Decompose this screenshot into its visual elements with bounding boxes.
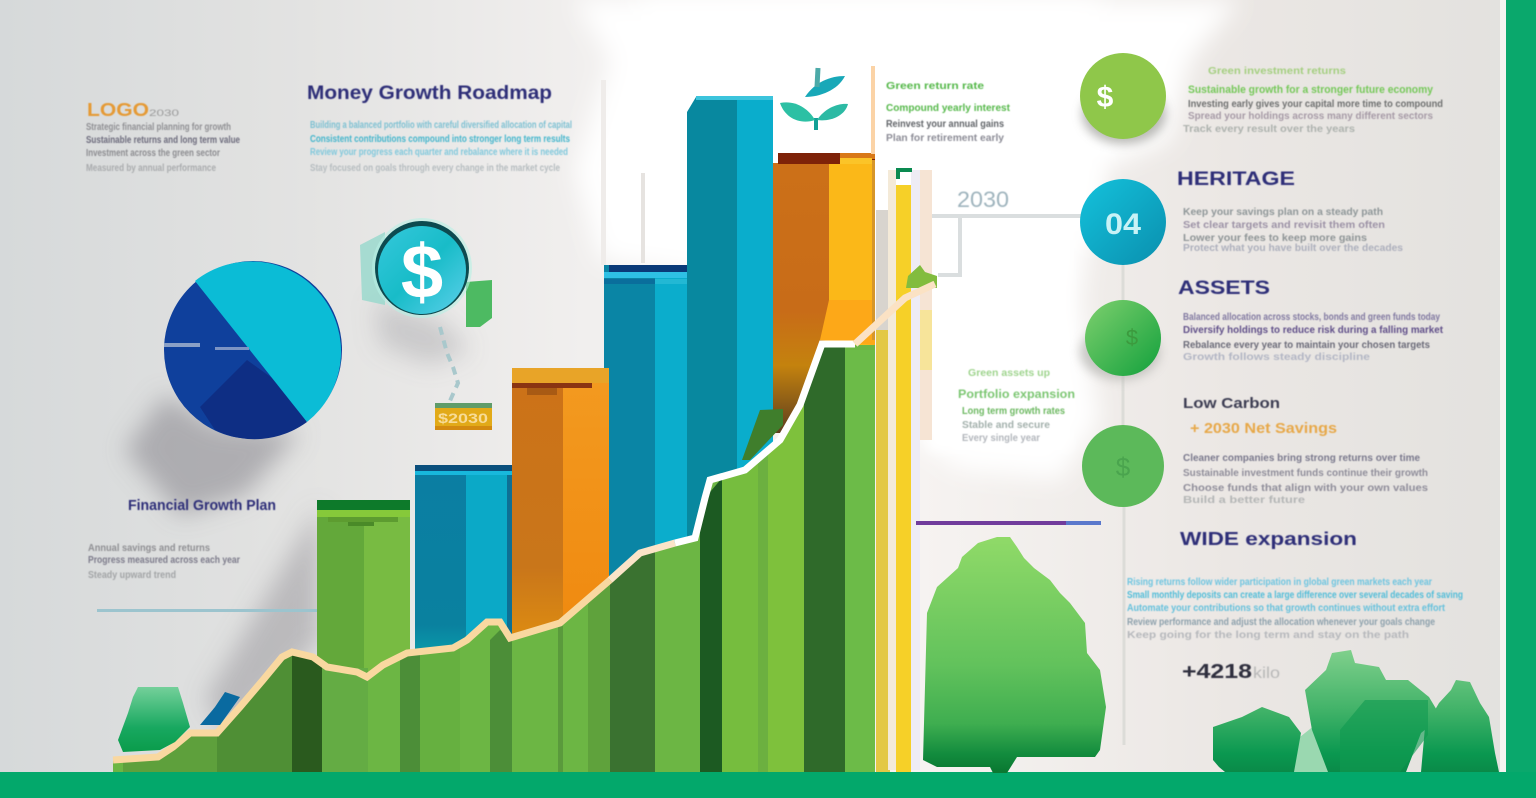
stat figure: +4218	[1182, 661, 1252, 683]
text block: centre callout	[958, 368, 1075, 444]
text block: right 3: ASSETS	[1178, 278, 1270, 299]
text block: right 2: Set clear targets and revisit them often	[1183, 220, 1385, 231]
text block: right 1: Green investment returns	[1208, 66, 1346, 77]
text block: right 5: WIDE expansion	[1180, 529, 1357, 549]
text block: top left: Sustainable returns and long term value	[86, 135, 240, 146]
stat figure: kilo	[1253, 665, 1280, 682]
text block: lower left	[88, 497, 276, 581]
tag label: $2030	[438, 410, 488, 426]
heading and text block: top centre	[307, 83, 572, 174]
text block: right 2: HERITAGE	[1177, 169, 1295, 190]
text block: lower left: Steady upward trend	[88, 570, 176, 581]
text block: right 4: Build a better future	[1183, 495, 1306, 506]
icon: small tree left	[118, 687, 190, 752]
text block: right 5: Small monthly deposits can create a large difference over several decades of saving	[1127, 590, 1463, 601]
text block: right 4: Sustainable investment funds continue their growth	[1183, 468, 1428, 479]
text block: right 5	[1127, 529, 1463, 641]
text block: centre callout: Green assets up	[968, 368, 1050, 379]
heading and text block: top centre: Review your progress each quarter and rebalance where it is needed	[310, 147, 568, 158]
text block: lower left: Financial Growth Plan	[128, 497, 276, 514]
text block: centre callout: Long term growth rates	[962, 406, 1065, 417]
text block: top middle	[886, 81, 1011, 144]
divider line	[871, 66, 875, 154]
connector: right circles	[1123, 260, 1124, 745]
year label with connector	[932, 187, 1082, 275]
heading and text block: top centre: Building a balanced portfolio with careful diversified allocation of capital	[310, 120, 572, 131]
right tree group	[1213, 650, 1499, 772]
icon: teal circle	[1080, 179, 1166, 265]
text block: right 2: Lower your fees to keep more gains	[1183, 233, 1367, 244]
text block: top left: 2030	[149, 108, 179, 118]
text block: lower left: Progress measured across each year	[88, 555, 240, 566]
text block: top left: LOGO	[87, 100, 149, 120]
text block: right 2: Protect what you have built over the decades	[1183, 243, 1403, 254]
icon: lower green circle: $	[1116, 452, 1131, 482]
text block: right 2: Keep your savings plan on a steady path	[1183, 207, 1383, 218]
text block: top left: Strategic financial planning for growth	[86, 122, 231, 133]
heading and text block: top centre: Consistent contributions compound into stronger long term results	[310, 134, 570, 145]
text block: top left: Investment across the green sector	[86, 148, 220, 159]
text block: right 5: Rising returns follow wider participation in global green markets each year	[1127, 577, 1432, 588]
bar chart	[317, 96, 875, 700]
text block: right 3: Growth follows steady discipline	[1183, 352, 1371, 363]
text block: right 4: Low Carbon	[1183, 395, 1280, 412]
icon: green circle: $	[1126, 325, 1138, 350]
icon: dollar coin: $	[401, 230, 443, 315]
text block: right 3: Rebalance every year to maintain your chosen targets	[1183, 340, 1430, 351]
text block: right 2	[1177, 169, 1403, 254]
bar: orange medium	[512, 368, 609, 650]
text block: top middle: Green return rate	[886, 81, 985, 92]
icon: lower green circle	[1082, 425, 1164, 507]
icon: dollar coin	[360, 218, 492, 403]
text block: right 4: Cleaner companies bring strong returns over time	[1183, 453, 1420, 464]
text block: right 5: Review performance and adjust the allocation whenever your goals change	[1127, 617, 1435, 628]
icon: green dollar circle	[1080, 53, 1166, 144]
bar: orange tall	[773, 153, 875, 433]
bar: teal short	[415, 465, 512, 665]
text block: right 1: Sustainable growth for a stronger future economy	[1188, 84, 1434, 96]
icon: teal circle: 04	[1105, 208, 1141, 241]
text block: right 1	[1183, 66, 1443, 135]
vertical stripes	[876, 168, 937, 772]
chart shadows	[125, 300, 470, 735]
icon: green circle	[1080, 300, 1161, 380]
text block: right 1: Track every result over the years	[1183, 124, 1355, 135]
text block: top middle: Compound yearly interest	[886, 103, 1011, 114]
text block: right 1: Spread your holdings across many different sectors	[1188, 111, 1433, 122]
text block: top middle: Reinvest your annual gains	[886, 119, 1004, 130]
green area chart	[113, 345, 875, 772]
bar: blue tallest	[687, 96, 773, 545]
text block: lower left: Annual savings and returns	[88, 543, 210, 554]
stat figure	[1182, 661, 1280, 683]
icon: small blue shape	[200, 692, 240, 725]
icon: leaf sprout	[780, 68, 848, 130]
text block: right 3	[1178, 278, 1444, 363]
text block: centre callout: Every single year	[962, 433, 1040, 444]
purple divider	[916, 521, 1101, 525]
text block: right 4: Choose funds that align with your own values	[1183, 483, 1428, 494]
text block: right 3: Balanced allocation across stocks, bonds and green funds today	[1183, 312, 1440, 323]
big tree	[923, 537, 1106, 773]
text block: top middle: Plan for retirement early	[886, 133, 1004, 144]
text block: right 3: Diversify holdings to reduce risk during a falling market	[1183, 325, 1444, 336]
text block: right 5: Automate your contributions so that growth continues without extra effort	[1127, 603, 1446, 614]
text block: centre callout: Stable and secure	[962, 420, 1050, 431]
text block: right 5: Keep going for the long term and stay on the path	[1127, 630, 1409, 641]
heading and text block: top centre: Stay focused on goals through every change in the market cycle	[310, 163, 560, 174]
text block: top left	[86, 100, 240, 174]
text block: right 4	[1183, 395, 1428, 506]
text block: top left: Measured by annual performance	[86, 163, 216, 174]
icon: green dollar circle: $	[1097, 81, 1114, 114]
year label with connector: 2030	[957, 187, 1009, 212]
bar: green	[317, 500, 410, 700]
text block: right 4: + 2030 Net Savings	[1190, 420, 1337, 437]
pie chart	[164, 261, 342, 439]
text block: centre callout: Portfolio expansion	[958, 387, 1075, 401]
tag label	[435, 403, 492, 430]
trend line	[113, 284, 935, 760]
text block: right 1: Investing early gives your capital more time to compound	[1188, 99, 1443, 110]
heading and text block: top centre: Money Growth Roadmap	[307, 83, 552, 104]
bar: blue mid	[604, 265, 696, 605]
blue rule lower left	[97, 609, 317, 612]
